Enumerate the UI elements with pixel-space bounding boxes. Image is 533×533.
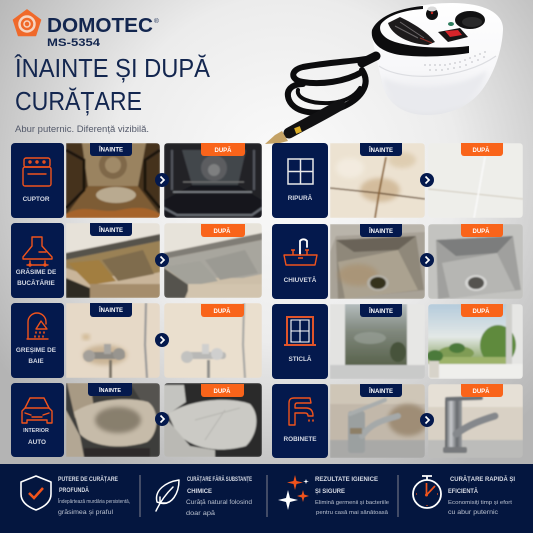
cup well — [455, 11, 485, 29]
photo: hood before — [66, 223, 160, 298]
hose — [288, 56, 377, 113]
benefit: hygienic results: REZULTATE IGIENICE — [315, 476, 379, 483]
photo: oven before — [66, 143, 160, 218]
label tabs: before: ÎNAINTE — [368, 307, 393, 315]
photo: window before — [330, 304, 425, 379]
carry handle — [372, 6, 469, 56]
photo: tile before — [330, 143, 425, 218]
benefit: hygienic results — [278, 475, 389, 516]
model number: MS-5354 — [47, 37, 101, 49]
label tabs: before: ÎNAINTE — [368, 227, 393, 235]
panel: grăsime de baie: GREȘIME DE — [16, 347, 57, 354]
benefit: fast cleaning: CURĂȚARE RAPIDĂ ȘI — [450, 474, 515, 483]
icon: shower — [27, 313, 48, 339]
power switch — [438, 28, 468, 42]
panel: cuptor: CUPTOR — [23, 196, 50, 203]
icon: sink — [284, 239, 317, 265]
icon: sparkles — [278, 475, 309, 510]
title: CURĂȚARE — [15, 87, 142, 116]
panel: chiuvetă: CHIUVETĂ — [284, 275, 317, 284]
row 1 left: cuptor — [11, 143, 262, 218]
panel: grăsime de baie: BAIE — [28, 358, 44, 365]
label tabs: after: DUPĂ — [472, 228, 490, 235]
panel: sticlă — [272, 304, 328, 379]
benefit: deep cleaning — [21, 474, 130, 516]
benefit: no chemicals: doar apă — [186, 510, 216, 517]
label plate — [388, 17, 435, 45]
label tabs: after: DUPĂ — [213, 388, 231, 395]
label tabs: after: DUPĂ — [472, 147, 490, 154]
panel: grăsime de bucătărie: BUCĂTĂRIE — [17, 278, 56, 287]
photo: hood after — [164, 223, 262, 298]
icon: oven — [23, 158, 51, 186]
logo: Domotec pentagon mark — [14, 10, 40, 36]
arrows: before to after chevrons — [155, 173, 434, 427]
footer band — [0, 464, 533, 533]
registered mark: ® — [154, 17, 159, 25]
label tabs: before: ÎNAINTE — [98, 146, 123, 154]
label tabs: before: ÎNAINTE — [98, 226, 123, 234]
photo: sink before — [330, 224, 425, 299]
benefit: no chemicals — [156, 474, 252, 517]
icon: shield — [21, 476, 51, 510]
label tabs: before: ÎNAINTE — [98, 386, 121, 394]
icon: car — [22, 398, 52, 423]
benefit: hygienic results: Elimină germenii și bacteriile — [315, 500, 389, 506]
icon: faucet — [289, 398, 313, 425]
title — [14, 54, 210, 116]
panel: robinete — [272, 384, 328, 458]
photo: tile after — [428, 143, 523, 218]
label tabs: after: DUPĂ — [213, 228, 231, 235]
icon: stopwatch — [413, 476, 441, 508]
title: ÎNAINTE ȘI DUPĂ — [14, 54, 210, 83]
panel: interior auto: AUTO — [28, 439, 46, 446]
label tabs: after: DUPĂ — [214, 147, 232, 154]
panel: interior auto — [11, 383, 64, 457]
panel: sticlă: STICLĂ — [288, 354, 312, 363]
control knob — [426, 6, 438, 20]
photo: faucet before — [330, 384, 428, 458]
photo: seat after — [164, 383, 262, 457]
benefit: deep cleaning: PROFUNDĂ — [59, 485, 89, 494]
panel: grăsime de bucătărie — [11, 223, 64, 298]
brass nozzle — [265, 131, 288, 144]
benefit: no chemicals: CHIMICE — [187, 488, 213, 495]
benefit: fast cleaning: Economisiți timp și efort — [448, 500, 513, 506]
photo: bath after — [164, 303, 262, 378]
icon: window — [284, 317, 316, 345]
benefit: deep cleaning: grăsimea și praful — [58, 509, 113, 516]
panel: ripură: RIPURĂ — [288, 193, 313, 202]
photo: bath before — [66, 303, 160, 378]
panel: grăsime de bucătărie: GRĂSIME DE — [16, 267, 57, 276]
product: steam cleaner — [265, 3, 503, 144]
label tabs: after: DUPĂ — [472, 388, 490, 395]
label tabs: before: ÎNAINTE — [368, 387, 393, 395]
indicator light — [448, 22, 454, 26]
benefit: fast cleaning: cu abur puternic — [448, 509, 499, 516]
subtitle: Abur puternic. Diferență vizibilă. — [15, 124, 149, 134]
panel: grăsime de baie — [11, 303, 64, 378]
benefit: fast cleaning — [413, 474, 515, 516]
benefit: no chemicals: CURĂȚARE FĂRĂ SUBSTANȚE — [187, 474, 252, 483]
photo: sink after — [428, 224, 523, 299]
benefit: hygienic results: pentru casă mai sănătoasă — [316, 510, 389, 516]
panel: chiuvetă — [272, 224, 328, 299]
panel: robinete: ROBINETE — [283, 436, 317, 443]
panel: ripură — [272, 143, 328, 218]
cleaner body — [372, 3, 503, 115]
photo: faucet after — [428, 384, 523, 458]
benefit: no chemicals: Curăță natural folosind — [186, 499, 252, 506]
label tabs: before: ÎNAINTE — [98, 306, 123, 314]
benefit: hygienic results: ȘI SIGURE — [315, 488, 346, 495]
photo: oven after — [164, 143, 262, 218]
label tabs: after: DUPĂ — [213, 308, 231, 315]
icon: leaf — [156, 480, 179, 511]
label tabs: after: DUPĂ — [472, 308, 490, 315]
label tabs: before — [88, 143, 402, 397]
panel: interior auto: INTERIOR — [23, 428, 49, 434]
photo: window after — [427, 304, 523, 379]
icon: tile grid — [288, 159, 313, 184]
brand name: DOMOTEC — [47, 14, 153, 37]
benefit: fast cleaning: EFICIENTĂ — [448, 486, 478, 495]
label tabs: after — [201, 143, 503, 397]
panel: cuptor — [11, 143, 64, 218]
icon: kitchen hood — [23, 237, 52, 266]
photo: seat before — [66, 383, 160, 457]
benefit: deep cleaning: Îndepărtează murdăria persistentă, — [57, 498, 130, 505]
steam gun handle — [289, 105, 340, 133]
benefit: deep cleaning: PUTERE DE CURĂȚARE — [58, 474, 119, 483]
yellow warning sticker — [294, 126, 302, 134]
label tabs: before: ÎNAINTE — [368, 146, 393, 154]
